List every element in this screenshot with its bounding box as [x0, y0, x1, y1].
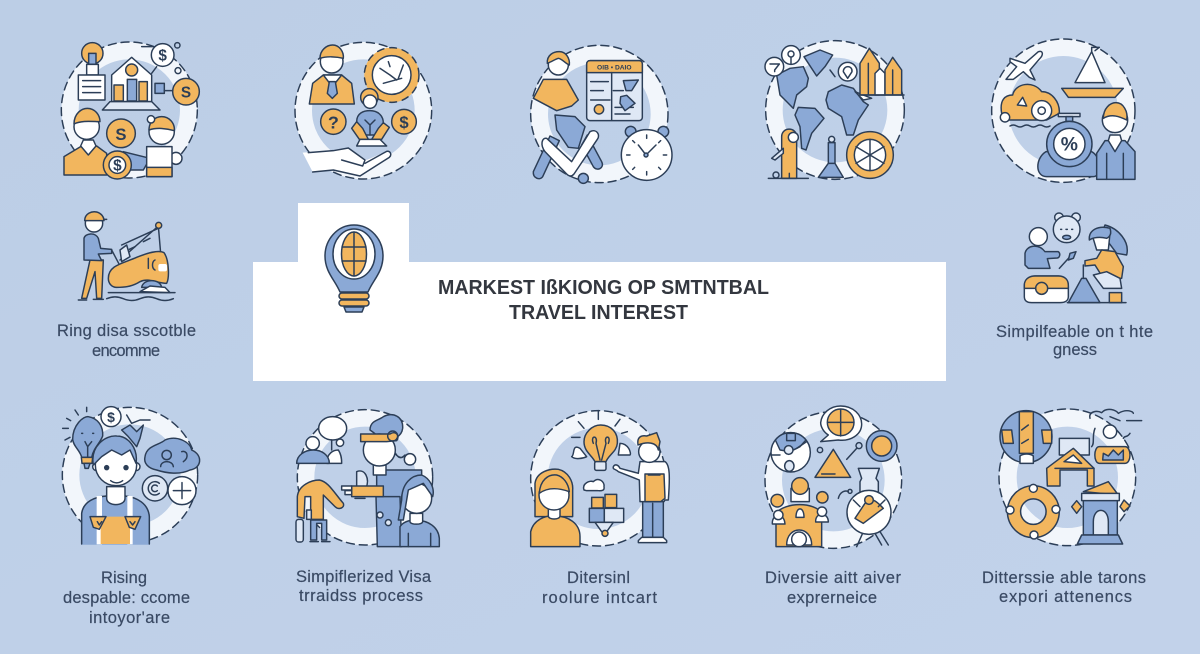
- label: Simpiflerized Visa: [296, 568, 432, 586]
- icon: compass, temple and map: [765, 406, 902, 548]
- panel: top icon 5 transport and savings: %: [1061, 135, 1078, 156]
- label: [996, 323, 1153, 359]
- icon: globe light bulb: [325, 225, 383, 312]
- label: Ring disa sscotble: [57, 322, 196, 340]
- icon: idea and people: [531, 411, 669, 547]
- white card: [253, 203, 946, 381]
- label: [542, 569, 657, 607]
- title: TRAVEL INTEREST: [509, 302, 688, 324]
- label: exprerneice: [787, 589, 877, 607]
- panel: top icon 2 advisor and support: $: [399, 113, 409, 132]
- label: expori attenencs: [999, 588, 1132, 606]
- label: [63, 569, 190, 627]
- label: intoyor'are: [89, 609, 170, 627]
- label: Diversie aitt aiver: [765, 569, 902, 587]
- label: roolure intcart: [542, 589, 657, 607]
- title: [438, 277, 769, 324]
- label: trraidss process: [299, 587, 423, 605]
- icon: person with ideas: $: [107, 409, 115, 425]
- label: Rising: [101, 569, 147, 587]
- panel: bottom icon 4 diverse experience: [765, 406, 902, 607]
- panel: top icon 4 world map and landmarks: [765, 41, 904, 179]
- label: [296, 568, 432, 605]
- panel: top icon 1 finance and family: $: [158, 48, 167, 65]
- panel: top icon 5 transport and savings: [992, 39, 1135, 182]
- panel: top icon 2 advisor and support: [295, 42, 432, 179]
- title: MARKEST IßKIONG OP SMTNTBAL: [438, 277, 769, 299]
- panel: bottom icon 1 rising income: [62, 407, 200, 627]
- panel: top icon 1 finance and family: $: [113, 158, 122, 175]
- panel: top icon 3 planner and clock: OIB ▪ DAIO: [597, 64, 632, 71]
- label: [57, 322, 196, 360]
- label: Simpilfeable on t hte: [996, 323, 1153, 341]
- panel: top icon 1 finance and family: S: [115, 125, 127, 144]
- panel: central title card: [253, 203, 946, 381]
- label: despable: ccome: [63, 589, 190, 607]
- panel: bottom icon 2 simplified visa: [296, 410, 439, 605]
- panel: top icon 3 planner and clock: [531, 45, 672, 183]
- icon: worker with boat: [78, 212, 175, 300]
- label: [982, 569, 1146, 606]
- label: Ditterssie able tarons: [982, 569, 1146, 587]
- icon: visa process people: [296, 410, 439, 547]
- label: Ditersinl: [567, 569, 630, 587]
- panel: top icon 1 finance and family: S: [181, 84, 191, 101]
- label: encomme: [92, 342, 160, 360]
- icon: child, bear and woman: [1024, 213, 1127, 303]
- icon: person with ideas: [62, 407, 200, 544]
- panel: left icon worker and boat: [57, 212, 196, 360]
- icon: landmarks: [999, 409, 1142, 546]
- panel: bottom icon 3 diverse culture: [531, 411, 669, 607]
- panel: top icon 1 finance and family: [61, 42, 199, 179]
- panel: bottom icon 5 destinations and attractions: [982, 409, 1146, 606]
- panel: top icon 2 advisor and support: ?: [328, 112, 339, 132]
- label: gness: [1053, 341, 1097, 359]
- panel: right icon family play: [996, 213, 1153, 359]
- label: [765, 569, 902, 607]
